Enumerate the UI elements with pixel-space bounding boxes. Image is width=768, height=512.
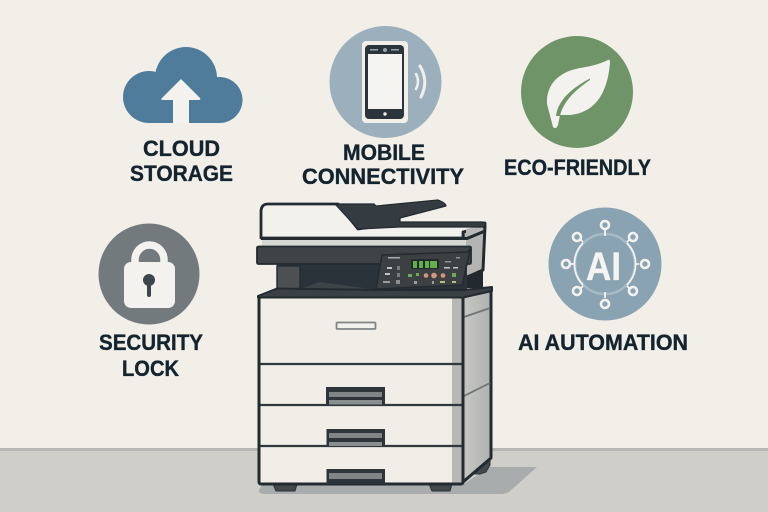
front control band xyxy=(257,246,471,264)
label: cloud storage xyxy=(130,136,233,186)
icon: AI automation xyxy=(548,208,662,320)
paper tray handle 2 xyxy=(326,429,385,446)
control panel xyxy=(376,247,471,289)
icon: AI automation: AI xyxy=(586,245,621,289)
scanner lid xyxy=(261,204,485,246)
label: security lock: LOCK xyxy=(122,356,179,381)
document feeder xyxy=(335,200,485,229)
icon: mobile connectivity xyxy=(330,26,442,138)
printer front body xyxy=(259,297,463,484)
left support block xyxy=(277,266,300,289)
paper tray handle 1 xyxy=(326,387,385,405)
label: security lock: SECURITY xyxy=(99,330,203,355)
output cavity xyxy=(277,262,467,291)
label: mobile connectivity xyxy=(302,140,464,189)
label: mobile connectivity: MOBILE xyxy=(343,140,425,165)
label: AI automation: AI AUTOMATION xyxy=(518,330,688,355)
printer xyxy=(257,200,492,491)
right upper body xyxy=(462,226,485,288)
printer feet xyxy=(273,460,490,491)
label: security lock xyxy=(99,330,203,381)
output tray xyxy=(300,282,378,290)
label: cloud storage: CLOUD xyxy=(143,136,220,161)
panel display xyxy=(411,259,439,269)
label: mobile connectivity: CONNECTIVITY xyxy=(302,164,464,189)
icon: cloud storage xyxy=(123,47,242,123)
paper tray handle 3 xyxy=(326,469,385,484)
label: eco-friendly: ECO-FRIENDLY xyxy=(504,155,651,180)
printer side panel xyxy=(463,289,491,482)
body top surface xyxy=(258,287,492,298)
floor xyxy=(0,448,768,512)
icon: eco-friendly leaf xyxy=(521,36,633,148)
icon: security lock xyxy=(98,224,200,324)
printer shadow xyxy=(259,467,537,494)
panel buttons xyxy=(383,257,460,284)
front door handle xyxy=(336,322,376,329)
label: cloud storage: STORAGE xyxy=(130,161,233,186)
